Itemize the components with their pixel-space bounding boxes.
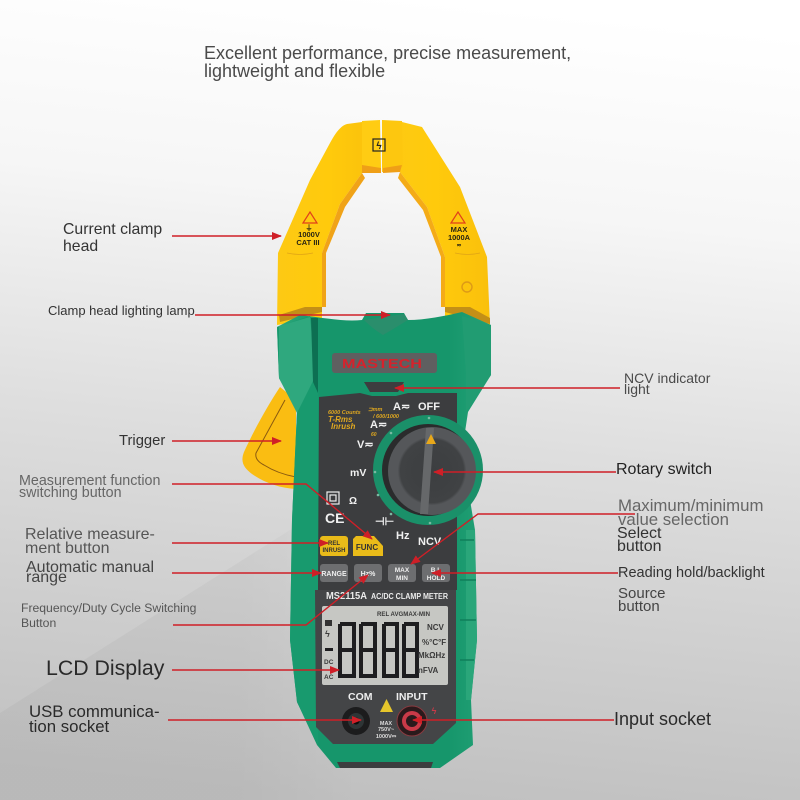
clamp markings: CAT III (296, 238, 320, 247)
label: relative button: ment button (25, 540, 110, 557)
REL INRUSH button: INRUSH (322, 548, 346, 554)
label: frequency button: Frequency/Duty Cycle Switching (21, 601, 196, 615)
clamp markings: ⏚ (306, 224, 312, 232)
label: function button (19, 473, 161, 501)
label: max min (618, 496, 763, 529)
LCD display (322, 606, 448, 685)
label: source button: Source (618, 585, 666, 602)
arrow: range button (172, 572, 321, 574)
arrow: NCV light (395, 387, 620, 389)
small yellow print: 60 (371, 432, 377, 438)
sockets: MAX (380, 721, 392, 727)
BL HOLD button (422, 564, 450, 582)
label: input socket: Input socket (614, 709, 711, 729)
label: NCV indicator (624, 370, 711, 397)
arrow: frequency button (173, 575, 368, 625)
REL INRUSH button: REL (328, 541, 340, 547)
range labels: ⊣⊢ (375, 515, 394, 528)
label: relative button: Relative measure- (25, 526, 155, 543)
sockets: ϟ (432, 706, 437, 716)
sockets (342, 691, 437, 740)
model label: AC/DC CLAMP METER (371, 592, 448, 601)
sockets: 750V~ (378, 727, 394, 733)
title: Excellent performance, precise measurement, (204, 43, 571, 63)
brand plate: MASTECH (342, 357, 422, 371)
arrow: max min (411, 514, 635, 564)
range labels: A≂ (370, 419, 387, 431)
function buttons (320, 536, 450, 582)
MAX MIN button (388, 564, 416, 582)
label: current clamp head: head (63, 238, 98, 255)
label: NCV indicator: NCV indicator (624, 370, 711, 386)
FUNC button: FUNC (356, 543, 378, 552)
sockets: 1000V⎓ (376, 734, 397, 740)
model label: MS2115A (326, 591, 367, 602)
meter body (277, 312, 491, 768)
arrow: trigger (172, 440, 281, 442)
label: source button (618, 585, 666, 615)
small yellow print: 6000 Counts (328, 410, 361, 416)
LCD display: nFVA (418, 666, 439, 675)
LCD display: NCV (427, 623, 445, 632)
label: USB socket: tion socket (29, 717, 110, 736)
clamp markings: 1000V (298, 230, 320, 239)
label: source button: button (618, 598, 660, 615)
clamp markings: ≂ (456, 243, 462, 249)
MAX MIN button: MAX (395, 567, 410, 574)
label: USB socket: USB communica- (29, 702, 160, 721)
arrow: relative button (172, 542, 328, 544)
MAX MIN button: MIN (396, 575, 408, 582)
clamp markings: MAX (451, 225, 467, 234)
double insulation icon (327, 492, 339, 504)
small yellow print: Inrush (331, 422, 356, 431)
clamp markings: 1000A (448, 233, 471, 242)
label: USB socket (29, 702, 160, 736)
title: lightweight and flexible (204, 61, 385, 81)
REL INRUSH button (320, 536, 348, 556)
label: select button: Select (617, 525, 662, 542)
brand plate (332, 353, 437, 373)
arrow: reading hold (432, 572, 618, 574)
sockets: INPUT (396, 691, 428, 703)
clamp meter (242, 120, 491, 768)
control panel (315, 393, 457, 744)
label: frequency button: Button (21, 616, 56, 630)
clamp markings (287, 139, 480, 292)
label: reading hold: Reading hold/backlight (618, 565, 765, 581)
label: select button (617, 525, 662, 555)
label: current clamp head: Current clamp (63, 221, 162, 238)
arrow: input socket (413, 719, 614, 721)
range labels: mV (350, 467, 366, 479)
label: select button: button (617, 538, 661, 555)
clamp markings: ϟ (376, 141, 382, 152)
sockets: COM (348, 691, 373, 703)
LCD display: DC (324, 659, 334, 666)
range labels: NCV (418, 536, 442, 548)
annotation lines (168, 236, 635, 720)
RANGE button: RANGE (321, 571, 347, 578)
range labels: OFF (418, 401, 440, 413)
range labels (325, 401, 442, 548)
Hz% button: Hz% (361, 571, 376, 578)
label: max min: value selection (618, 510, 729, 529)
LCD display: %°C°F (422, 638, 446, 647)
range labels: A≂ (393, 401, 410, 413)
range labels: Ω (349, 496, 357, 507)
arrow: clamp head (172, 235, 281, 237)
model label (326, 591, 448, 602)
BL HOLD button: HOLD (427, 575, 446, 582)
LCD display: REL AVGMAX-MIN (377, 611, 430, 618)
label: automatic manual range: Automatic manual (26, 559, 154, 576)
label: relative button (25, 526, 155, 557)
clamp jaws (277, 120, 490, 325)
arrow: function button (172, 484, 372, 539)
label: max min: Maximum/minimum (618, 496, 763, 515)
small yellow print: / 600/1000 (372, 414, 399, 420)
label: frequency button (21, 601, 196, 630)
rotary switch (373, 415, 483, 525)
range labels: V≂ (357, 439, 374, 451)
label: automatic manual range: range (26, 569, 67, 586)
range labels: Hz (396, 530, 410, 542)
label: trigger: Trigger (119, 433, 165, 449)
label: function button: Measurement function (19, 473, 161, 489)
small yellow print: ⊐mm (368, 407, 382, 413)
arrow: rotary switch (434, 471, 616, 473)
label: automatic manual range (26, 559, 154, 586)
arrow: LCD (172, 669, 339, 671)
label: rotary switch: Rotary switch (616, 461, 712, 478)
trigger (242, 387, 296, 489)
label: current clamp head (63, 221, 162, 255)
label: LCD display: LCD Display (46, 656, 165, 680)
small yellow print (328, 407, 399, 438)
arrow: USB socket (168, 719, 361, 721)
BL HOLD button: B.L (431, 567, 441, 574)
label: clamp head lighting lamp: Clamp head lighting lamp (48, 303, 195, 318)
LCD display: AC (324, 674, 334, 681)
arrow: clamp lamp (195, 314, 390, 316)
small yellow print: T-Rms (328, 415, 353, 424)
LCD display: MkΩHz (418, 651, 445, 660)
title (204, 43, 571, 81)
NCV light (364, 382, 404, 392)
label: NCV indicator: light (624, 381, 650, 397)
label: function button: switching button (19, 485, 122, 501)
range labels: CE (325, 510, 344, 526)
LCD display: ϟ (325, 629, 330, 639)
